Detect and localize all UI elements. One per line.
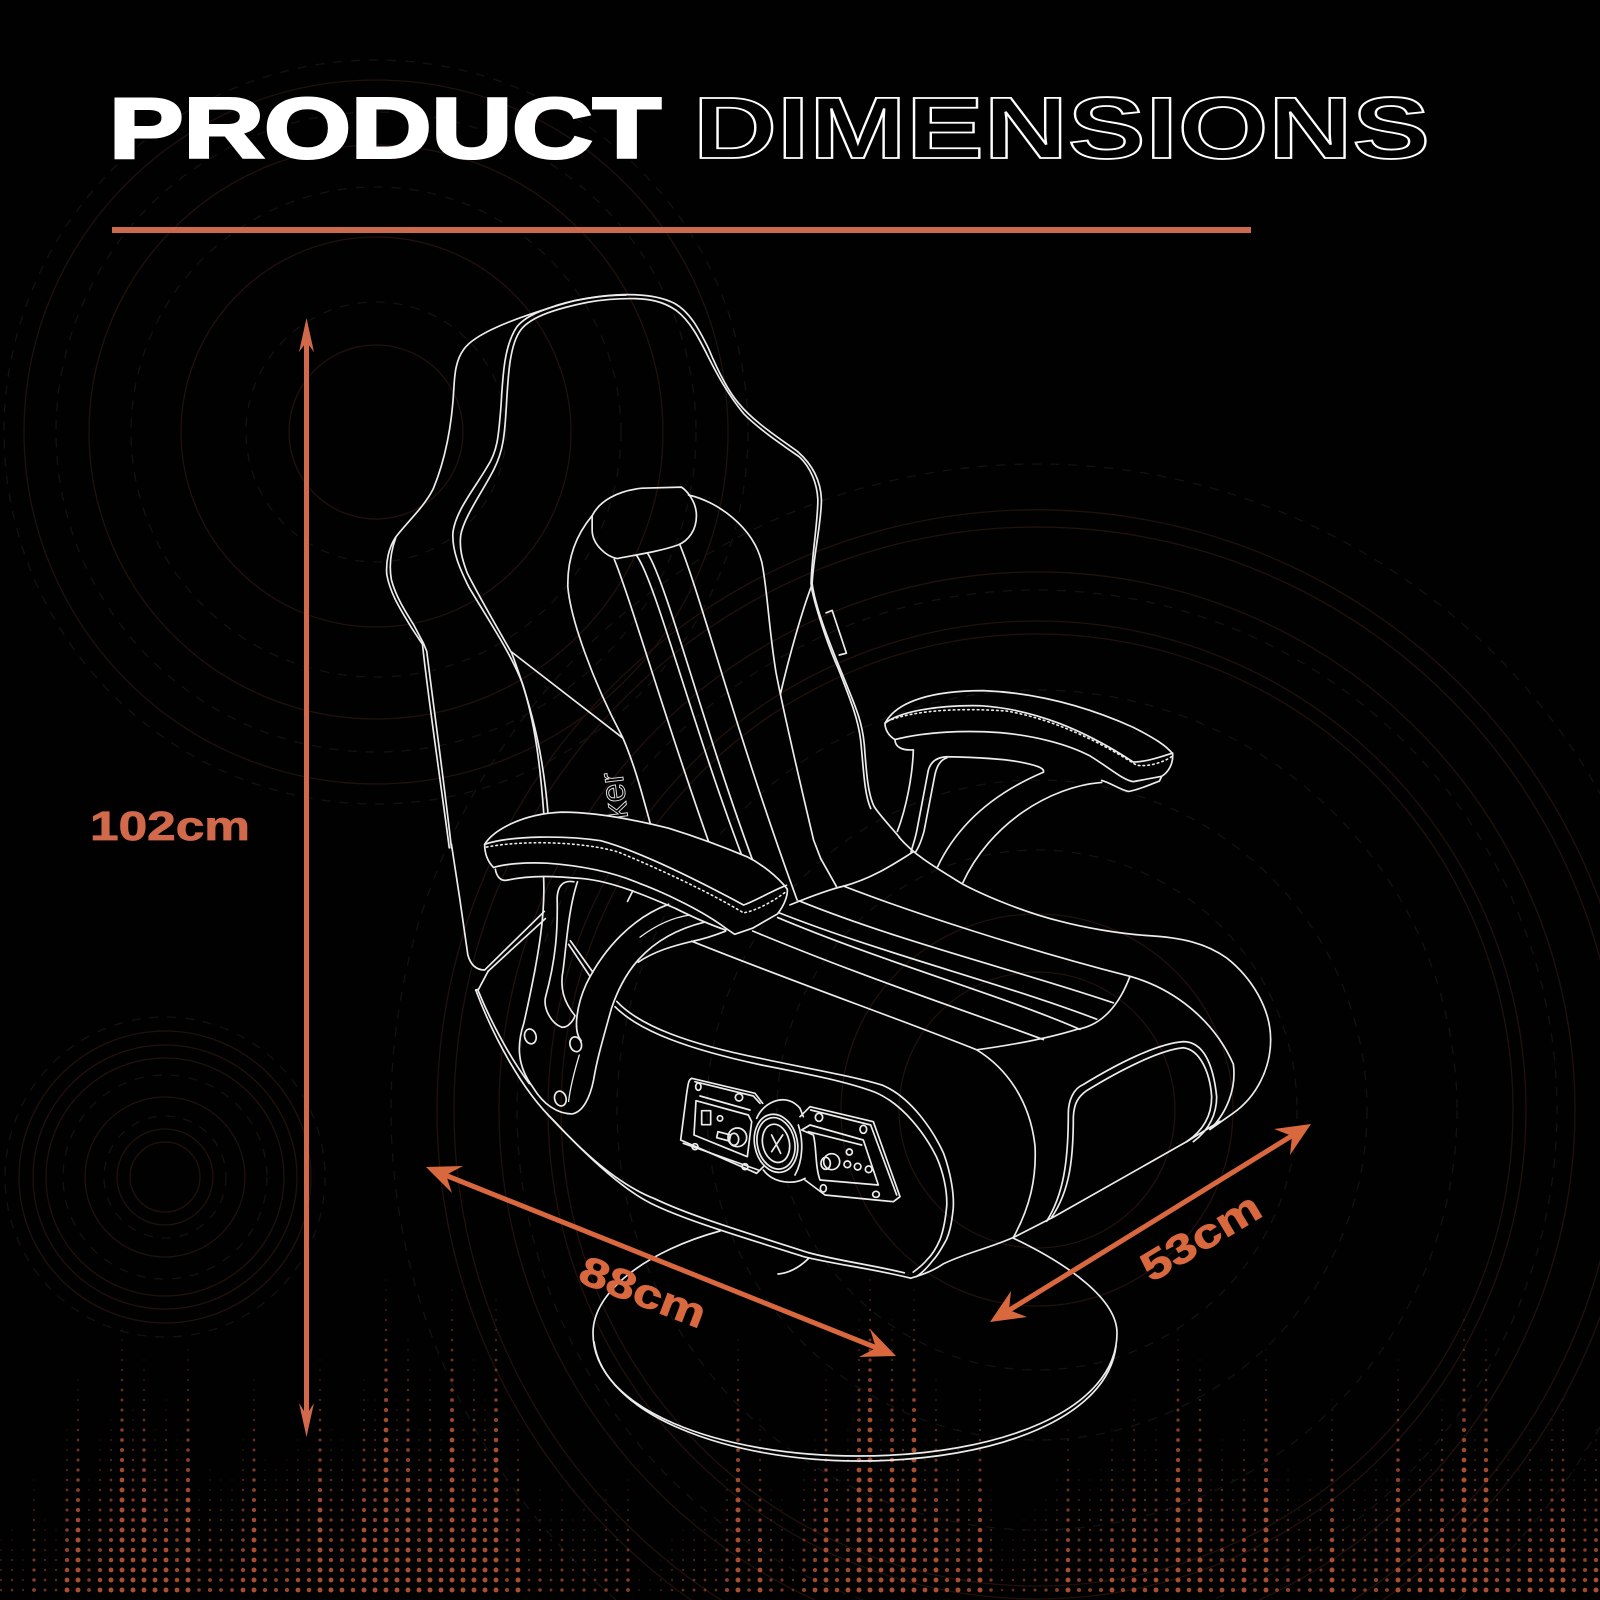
brand lettering: ker [592,770,636,822]
label: height: 102cm [90,803,250,849]
control panel [681,1078,900,1202]
swivel base disc [593,1231,1117,1461]
backrest centre stripes [614,544,797,900]
side button [826,610,846,655]
side panel piping [617,1001,953,1276]
width arrow [426,1166,896,1357]
right plate [800,1107,900,1202]
back shell lower edge [451,844,544,970]
title word: DIMENSIONS: DIMENSIONS [693,80,1430,177]
title [109,80,1430,177]
left armrest bracket [519,876,704,1114]
rocker base [476,990,911,1278]
right armrest [885,691,1173,782]
depth arrow [990,1124,1311,1322]
equalizer dot columns [0,1269,1598,1592]
concentric rings: bottom left [5,1017,325,1337]
seat stripes [844,886,1234,1129]
backrest [387,295,899,900]
left plate [681,1078,763,1173]
side cushion panel [1047,1042,1217,1221]
seat and right armrest [692,691,1271,1238]
label: width: 88cm [573,1247,713,1337]
right arm support [1102,776,1162,791]
label: depth: 53cm [1132,1183,1269,1291]
concentric rings: top left [4,60,748,804]
base, side piping and left armrest [451,812,1013,1278]
concentric rings: large right [391,464,1600,1600]
centre logo badge [749,1100,805,1182]
height arrow [299,318,314,1437]
headrest [592,487,696,559]
title underline [112,227,1251,233]
chair line drawing [387,295,1271,1461]
seat edge [899,837,1271,1129]
left armrest [485,812,787,934]
title word: PRODUCT: PRODUCT [109,82,661,176]
